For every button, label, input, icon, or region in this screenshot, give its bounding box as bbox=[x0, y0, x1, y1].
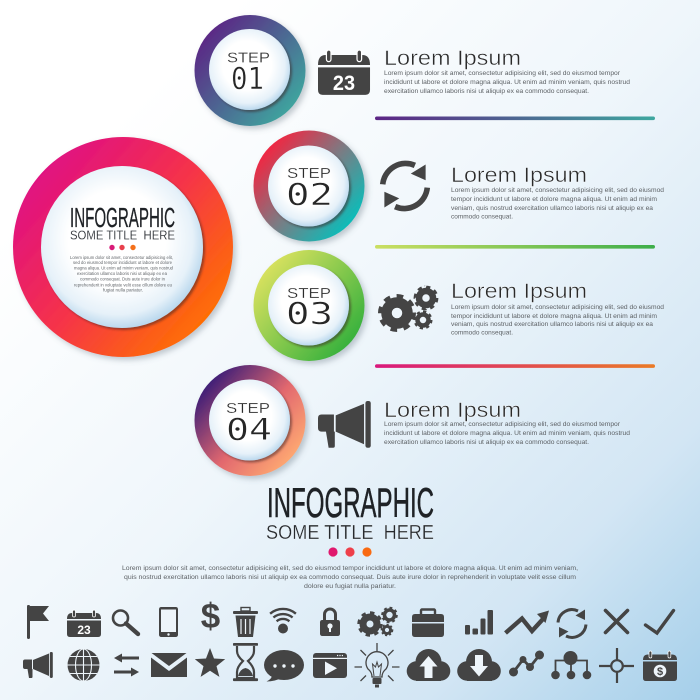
text block: step 2: tempor incididunt ut labore et dolore magna aliqua. Ut enim ad minim bbox=[451, 196, 657, 203]
icon: dollar calendar: $ bbox=[657, 666, 663, 678]
text block: step 1: incididunt ut labore et dolore magna aliqua. Ut enim ad minim veniam, quis nostrud bbox=[384, 79, 630, 86]
icon: wifi bbox=[270, 609, 296, 634]
step 1 label: STEP bbox=[227, 50, 270, 66]
divider 2 bbox=[375, 245, 655, 249]
text block: bottom body: Lorem ipsum dolor sit amet, consectetur adipisicing elit, sed do eiusmod tempor incididunt ut labore et dolore magna aliqua. Ut enim ad minim veniam, bbox=[122, 565, 578, 572]
icon: hourglass bbox=[233, 643, 258, 681]
icon: cloud download bbox=[457, 649, 501, 681]
icon: calendar: 23 bbox=[77, 623, 91, 637]
icon: star bbox=[195, 648, 225, 677]
icon: trash bbox=[233, 608, 258, 637]
text block: bottom body bbox=[122, 565, 578, 590]
text block: step 1 bbox=[384, 70, 630, 95]
text block: step 2: Lorem ipsum dolor sit amet, consectetur adipisicing elit, sed do eiusmod bbox=[451, 187, 664, 194]
icon: calendar large: 23 bbox=[333, 71, 355, 95]
heading: bottom title: INFOGRAPHIC bbox=[267, 479, 434, 526]
icon: calendar bbox=[67, 610, 101, 637]
text block: circle body: sed do eiusmod tempor incididunt ut labore et dolore bbox=[73, 260, 173, 265]
icon: crosshair bbox=[599, 648, 634, 683]
icon: padlock bbox=[320, 609, 340, 636]
text block: bottom body: dolore eu fugiat nulla pariatur. bbox=[304, 583, 396, 590]
text block: step 4: Lorem ipsum dolor sit amet, consectetur adipisicing elit, sed do eiusmod tempor bbox=[384, 421, 621, 428]
icon: gears large bbox=[380, 287, 437, 330]
step 3 label: STEP bbox=[287, 285, 331, 302]
heading: circle title: INFOGRAPHIC bbox=[70, 202, 175, 233]
icon: dollar calendar bbox=[643, 651, 677, 681]
text block: step 3: commodo consequat. bbox=[451, 330, 513, 336]
icon: check bbox=[646, 610, 674, 633]
heading: bottom subtitle: SOME TITLE HERE bbox=[266, 522, 434, 544]
icon: megaphone large bbox=[318, 401, 371, 448]
icon: hierarchy bbox=[551, 651, 591, 679]
heading: step 2 title: Lorem Ipsum bbox=[451, 164, 587, 187]
text block: circle body: exercitation ullamco laboris nisi ut aliquip ex ea bbox=[77, 271, 168, 276]
text block: circle body: commodo consequat. Duis aute irure dolor in bbox=[80, 276, 166, 282]
icon: cross bbox=[606, 610, 628, 632]
text block: circle body: Lorem ipsum dolor sit amet, consectetur adipisicing elit, bbox=[70, 255, 173, 260]
text block: step 4 bbox=[384, 421, 630, 446]
icon: swap arrows bbox=[114, 654, 139, 676]
icon: tablet bbox=[159, 607, 178, 637]
text block: step 3: Lorem ipsum dolor sit amet, consectetur adipisicing elit, sed do eiusmod bbox=[451, 304, 664, 311]
dots: circle bbox=[109, 245, 136, 250]
icon: megaphone bbox=[23, 652, 53, 678]
icon: bar chart bbox=[465, 610, 493, 634]
text block: step 4: incididunt ut labore et dolore magna aliqua. Ut enim ad minim veniam, quis nostrud bbox=[384, 430, 630, 437]
step 4 label: STEP bbox=[226, 400, 270, 417]
text block: step 2: veniam, quis nostrud exercitation ullamco laboris nisi ut aliquip ex ea bbox=[451, 205, 653, 212]
divider 1 bbox=[375, 116, 655, 120]
text block: step 4: exercitation ullamco laboris nisi ut aliquip ex ea commodo consequat. bbox=[384, 439, 589, 446]
heading: step 3 title: Lorem Ipsum bbox=[451, 280, 587, 303]
icon: refresh bbox=[558, 610, 586, 638]
text block: step 3: veniam, quis nostrud exercitation ullamco laboris nisi ut aliquip ex ea bbox=[451, 321, 653, 328]
heading: circle subtitle: SOME TITLE HERE bbox=[70, 228, 175, 242]
text block: circle body: reprehenderit in voluptate velit esse cillum dolore eu bbox=[74, 282, 173, 287]
panel: step 3 bbox=[254, 250, 364, 361]
panel: step 2 bbox=[254, 130, 364, 242]
text block: step 3 bbox=[451, 304, 664, 336]
text block: step 1: Lorem ipsum dolor sit amet, consectetur adipisicing elit, sed do eiusmod tempor bbox=[384, 70, 621, 77]
divider 3 bbox=[375, 364, 655, 368]
icon: refresh large bbox=[383, 163, 427, 209]
heading: step 4 title: Lorem Ipsum bbox=[384, 399, 521, 422]
icon: dollar: $ bbox=[201, 597, 220, 636]
text block: circle body bbox=[70, 255, 174, 292]
step 1 number: 01 bbox=[231, 62, 264, 97]
text block: bottom body: quis nostrud exercitation ullamco laboris nisi ut aliquip ex ea commodo consequat. Duis aute irure dolor in reprehenderit in voluptate velit esse cillum bbox=[124, 574, 577, 581]
text block: step 2 bbox=[451, 187, 664, 220]
text block: circle body: magna aliqua. Ut enim ad minim veniam, quis nostrud bbox=[74, 265, 174, 270]
icon: trend arrow bbox=[506, 610, 549, 633]
icon: calendar large bbox=[318, 50, 370, 95]
text block: circle body: fugiat nulla pariatur. bbox=[103, 288, 143, 292]
step 3 number: 03 bbox=[286, 297, 333, 332]
icon: globe bbox=[68, 649, 100, 681]
text block: step 2: commodo consequat. bbox=[451, 214, 513, 220]
dots: bottom bbox=[328, 547, 372, 557]
icon: magnifier bbox=[113, 610, 138, 634]
heading: step 1 title: Lorem Ipsum bbox=[384, 47, 521, 70]
step 2 number: 02 bbox=[286, 178, 333, 213]
step 4 number: 04 bbox=[226, 413, 272, 448]
icon: line nodes bbox=[509, 650, 544, 676]
step 2 label: STEP bbox=[287, 165, 331, 182]
icon: speech bubble bbox=[264, 650, 304, 682]
text block: step 1: exercitation ullamco laboris nisi ut aliquip ex ea commodo consequat. bbox=[384, 88, 589, 95]
text block: step 3: tempor incididunt ut labore et dolore magna aliqua. Ut enim ad minim bbox=[451, 313, 657, 320]
panel: step 1 bbox=[194, 15, 306, 126]
icon: flag bbox=[27, 605, 49, 639]
icon: gears bbox=[359, 608, 397, 635]
panel: main circle bbox=[13, 137, 233, 357]
icon: cloud upload bbox=[407, 649, 450, 681]
icon: video window bbox=[313, 653, 347, 678]
icon: mail bbox=[151, 653, 187, 677]
icon: briefcase bbox=[412, 610, 444, 637]
icon: lightbulb bbox=[354, 643, 400, 688]
panel: step 4 bbox=[194, 365, 306, 476]
